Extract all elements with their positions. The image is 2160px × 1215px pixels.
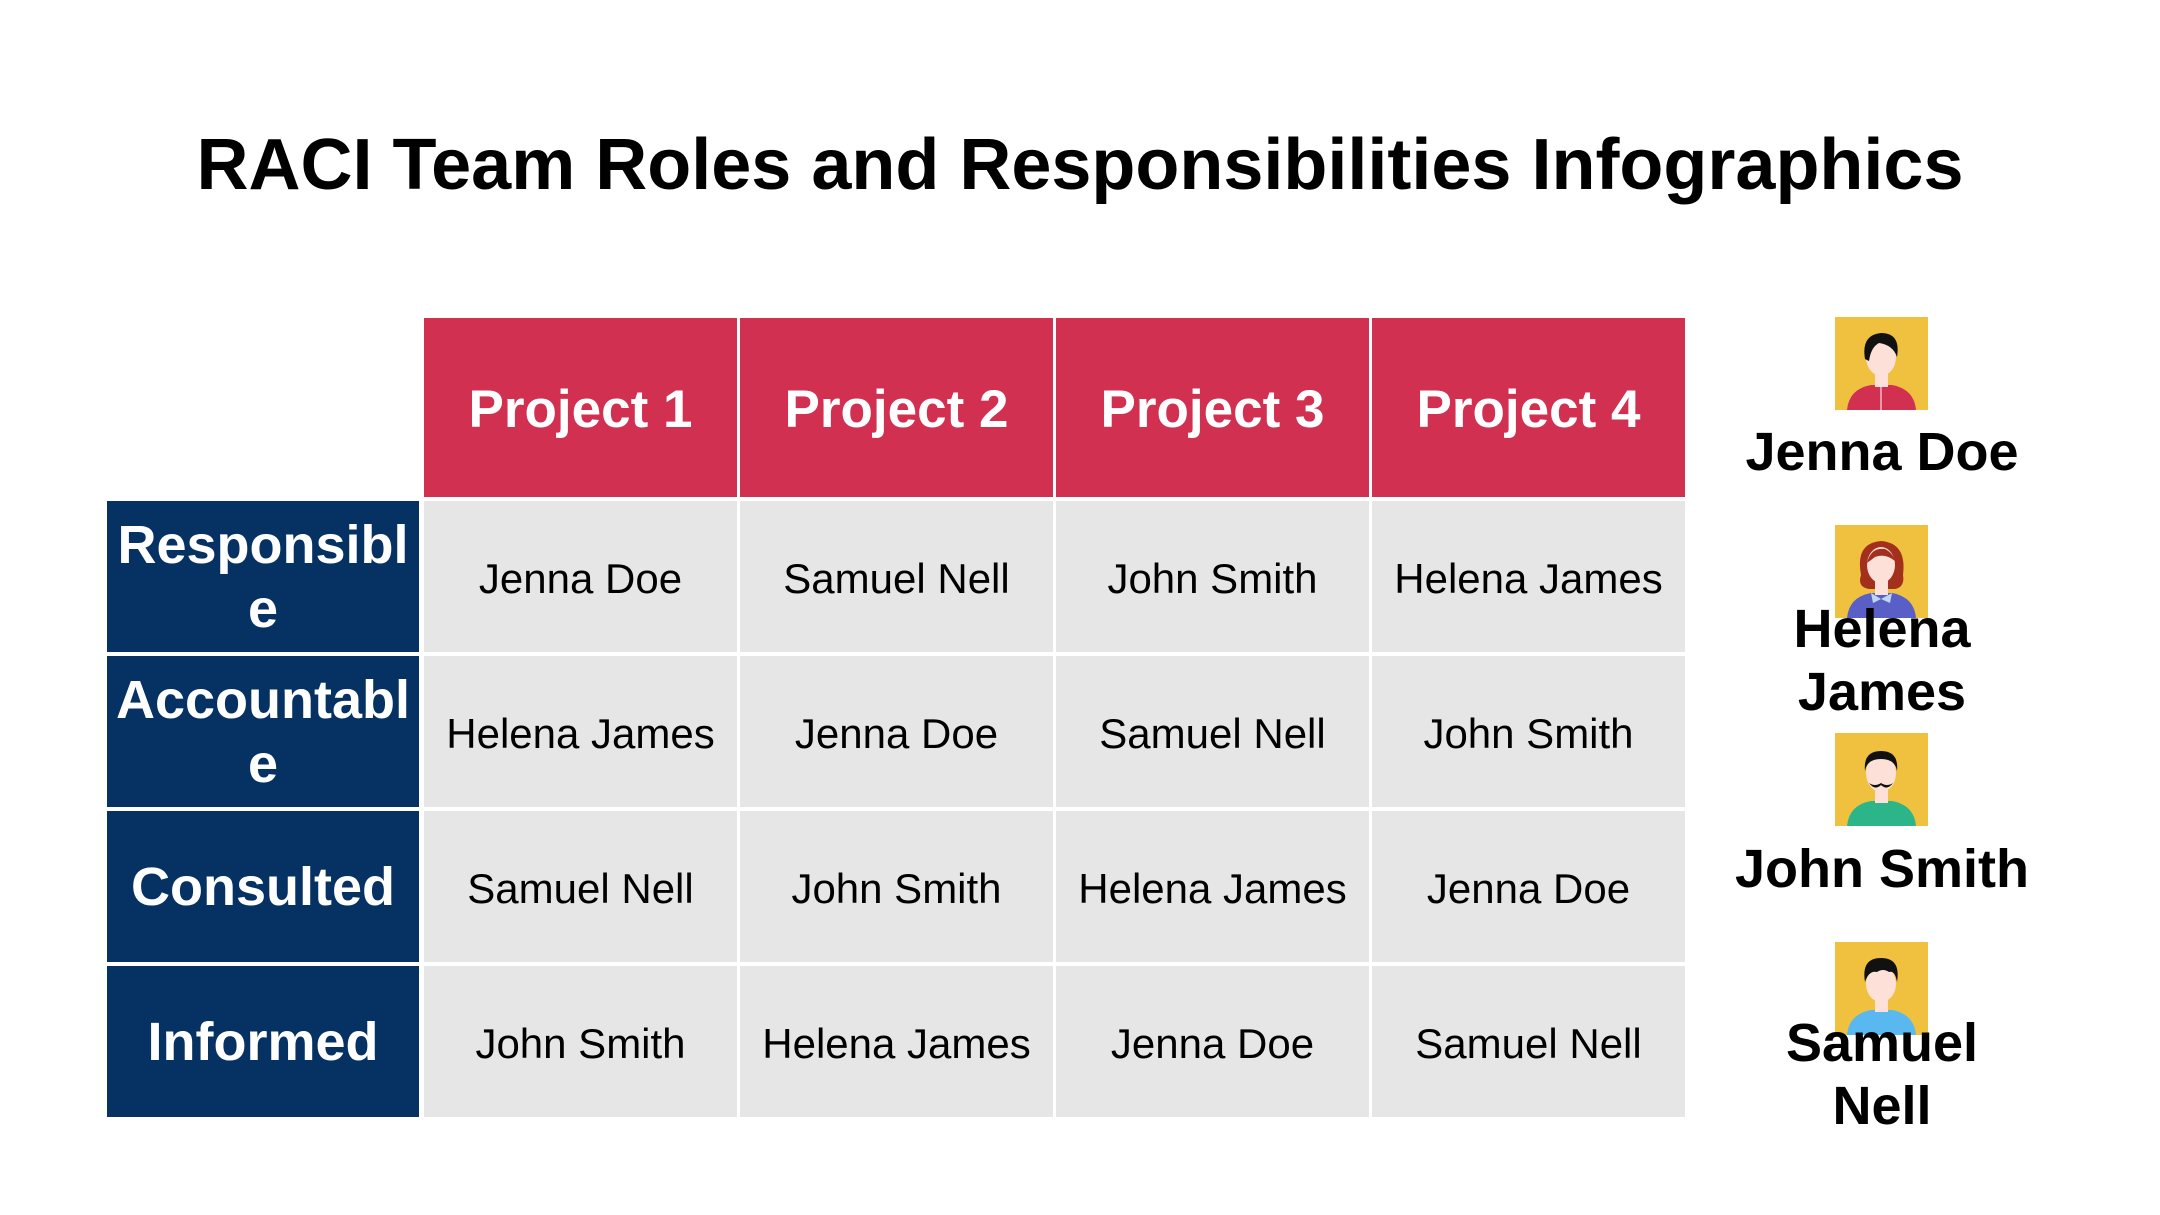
cells row 3 (424, 811, 1685, 962)
icon: John Smith avatar (1835, 733, 1928, 826)
header: Project 4: Project 4 (1417, 380, 1640, 439)
header: Project 1: Project 1 (469, 380, 692, 439)
row label: Informed (107, 966, 419, 1117)
cells row 2: Jenna Doe (795, 710, 998, 756)
header: Project 2 (740, 318, 1053, 497)
title: RACI Team Roles and Responsibilities Infographics (196, 125, 1964, 205)
header: Project 3 (1056, 318, 1369, 497)
cells row 2 (424, 656, 1685, 807)
row label: Consulted: Consulted (131, 856, 395, 916)
cells row 3: Samuel Nell (467, 864, 694, 912)
row label: Responsible: Responsible (117, 514, 409, 638)
cells row 3: Jenna Doe (1427, 864, 1630, 912)
cells row 2: Helena James (446, 710, 715, 756)
row label: Accountable: Accountable (116, 670, 410, 794)
label: Helena James: Helena (1793, 599, 1971, 659)
row label: Informed: Informed (147, 1012, 378, 1072)
cells row 4: Helena James (762, 1020, 1031, 1066)
label: Jenna Doe: Jenna Doe (1745, 422, 2019, 482)
header: Project 3: Project 3 (1101, 380, 1324, 439)
cells row 4: Samuel Nell (1415, 1020, 1642, 1066)
header: Project 1 (424, 318, 737, 497)
label: Samuel Nell (1786, 1013, 1978, 1136)
cells row 2: John Smith (1423, 710, 1634, 756)
cells row 1 (424, 501, 1685, 652)
label: Samuel Nell: Nell (1832, 1076, 1932, 1136)
label: Helena James (1793, 599, 1971, 722)
cells row 1: Samuel Nell (783, 554, 1010, 602)
icon: Helena James avatar (1835, 525, 1928, 618)
cells row 4: Jenna Doe (1111, 1020, 1314, 1066)
label: Samuel Nell: Samuel (1786, 1013, 1978, 1073)
cells row 3: John Smith (791, 864, 1002, 912)
row label: Consulted (107, 811, 419, 962)
label: John Smith: John Smith (1735, 839, 2029, 899)
cells row 4: John Smith (475, 1020, 686, 1066)
icon: Jenna Doe avatar (1835, 317, 1928, 410)
table (107, 318, 1685, 1117)
cells row 1: Jenna Doe (479, 554, 682, 602)
cells row 3: Helena James (1078, 864, 1347, 912)
cells row 1: Helena James (1394, 554, 1663, 602)
label: Helena James: James (1798, 662, 1966, 722)
cells row 2: Samuel Nell (1099, 710, 1326, 756)
icon: Samuel Nell avatar (1835, 942, 1928, 1035)
cells row 1: John Smith (1107, 554, 1318, 602)
header: Project 4 (1372, 318, 1685, 497)
header: Project 2: Project 2 (785, 380, 1008, 439)
cells row 4 (424, 966, 1685, 1117)
